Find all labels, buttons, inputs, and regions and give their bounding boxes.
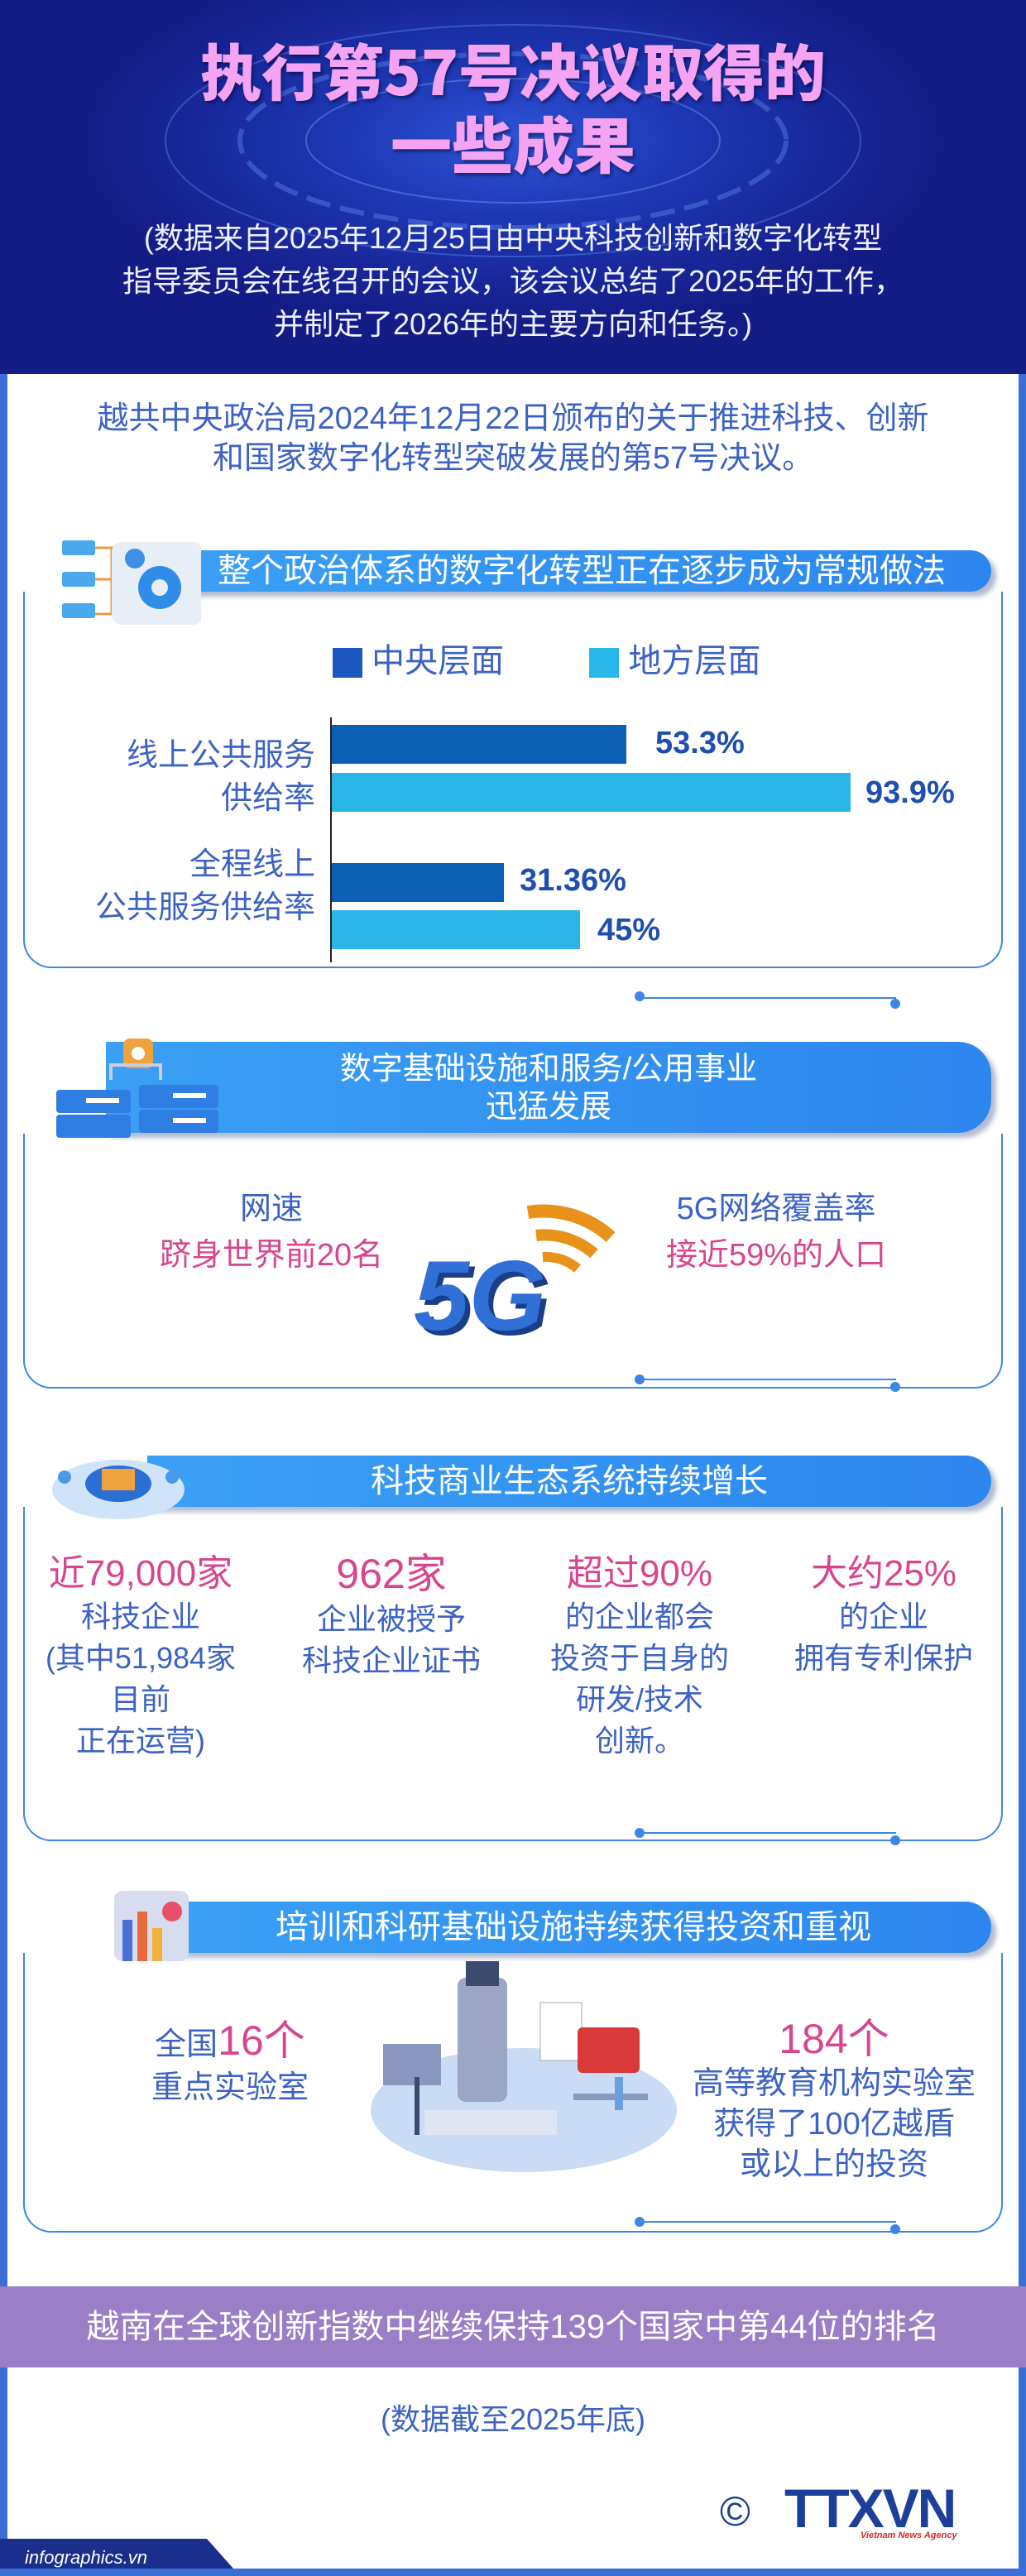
stat: 90%: 创新。	[595, 1724, 684, 1758]
illustration: laboratory	[371, 1961, 677, 2172]
bar chart: 线上公共服务	[127, 738, 315, 773]
ranking band	[0, 2286, 1026, 2367]
icon: 5G	[414, 1205, 616, 1345]
bar chart: 53.3%	[655, 726, 745, 760]
panel 2 box	[23, 1134, 1003, 1389]
stat: 184 institutions: 184个	[779, 2016, 889, 2062]
text: 5G coverage	[666, 1192, 886, 1273]
stat: 962	[302, 1551, 481, 1677]
panel 4 box	[23, 1953, 1003, 2233]
panel 1 box	[23, 592, 1003, 968]
header background	[0, 0, 1026, 374]
subtitle: 指导委员会在线召开的会议，该会议总结了2025年的工作，	[122, 264, 904, 298]
subtitle	[122, 221, 904, 341]
stat: 16 labs: 全国16个	[155, 2017, 305, 2064]
text: internet speed: 跻身世界前20名	[160, 1238, 383, 1273]
stat: 79000	[46, 1553, 236, 1758]
icon: servers	[56, 1039, 218, 1138]
stat: 962: 企业被授予	[317, 1602, 466, 1636]
title	[200, 25, 827, 186]
bar chart: 31.36%	[520, 863, 626, 898]
bar chart: 93.9%	[865, 775, 955, 810]
icon: network platform	[52, 1460, 185, 1519]
stat: 962: 962家	[336, 1551, 447, 1597]
stat: 25%: 大约25%	[811, 1553, 956, 1594]
panel 3 header: 科技商业生态系统持续增长	[371, 1463, 768, 1499]
stat: 90%: 的企业都会	[565, 1600, 714, 1633]
stat: 79000: 科技企业	[81, 1600, 200, 1633]
stat: 184 institutions: 获得了100亿越盾	[713, 2107, 955, 2142]
intro text	[97, 401, 929, 476]
ranking band: 越南在全球创新指数中继续保持139个国家中第44位的排名	[86, 2309, 940, 2345]
stat: 79000: 近79,000家	[49, 1553, 233, 1594]
stat: 25%	[794, 1553, 973, 1675]
stat: 79000: 目前	[111, 1682, 170, 1716]
panel 4: training and research	[23, 1891, 1003, 2233]
panel 1 header: 整个政治体系的数字化转型正在逐步成为常规做法	[218, 553, 946, 589]
legend: 中央层面 地方层面	[372, 643, 760, 679]
logo: TTXVN: Vietnam News Agency	[861, 2530, 957, 2540]
stat: 962: 科技企业证书	[302, 1643, 481, 1677]
text: internet speed	[160, 1192, 383, 1273]
side borders	[0, 0, 7, 2576]
stat: 16 labs	[151, 2017, 309, 2105]
logo: TTXVN: TTXVN	[784, 2478, 955, 2539]
stat: 90%: 研发/技术	[576, 1682, 703, 1716]
data note: (数据截至2025年底)	[381, 2402, 645, 2436]
bar chart	[95, 717, 955, 962]
panel 3 box	[23, 1507, 1003, 1841]
bar chart: 公共服务供给率	[95, 890, 315, 925]
subtitle: (数据来自2025年12月25日由中央科技创新和数字化转型	[144, 221, 882, 255]
bar chart: 45%	[597, 913, 660, 947]
footer	[0, 2539, 233, 2569]
title: 执行第57号决议取得的	[200, 25, 826, 113]
stat: 90%: 投资于自身的	[550, 1641, 729, 1675]
panel 2: infrastructure	[23, 1039, 1003, 1389]
text: 5G coverage: 接近59%的人口	[666, 1238, 886, 1273]
text: internet speed: 网速	[240, 1192, 303, 1226]
logo: TTXVN: ©	[720, 2488, 750, 2535]
stat: 16 labs: 重点实验室	[151, 2070, 309, 2105]
intro text: 越共中央政治局2024年12月22日颁布的关于推进科技、创新	[97, 401, 929, 436]
stat: 25%: 拥有专利保护	[794, 1641, 973, 1675]
icon: lab tools	[114, 1891, 189, 1961]
panel 2 header	[106, 1042, 991, 1133]
stat: 90%	[550, 1553, 729, 1758]
text: 5G coverage: 5G网络覆盖率	[677, 1192, 875, 1226]
bar chart: 供给率	[221, 781, 315, 816]
panel 2 header: 迅猛发展	[486, 1090, 611, 1125]
stat: 184 institutions: 高等教育机构实验室	[693, 2066, 976, 2101]
panel 4 header	[156, 1902, 991, 1953]
stat: 25%: 的企业	[839, 1600, 928, 1633]
panel 3: tech business	[23, 1456, 1003, 1841]
panel 1: digital transformation	[23, 540, 1003, 999]
panel 4 header: 培训和科研基础设施持续获得投资和重视	[276, 1909, 871, 1945]
stat: 90%: 超过90%	[567, 1553, 712, 1594]
stat: 79000: 正在运营)	[76, 1724, 205, 1758]
subtitle: 并制定了2026年的主要方向和任务。)	[274, 307, 752, 341]
panel 2 header: 数字基础设施和服务/公用事业	[340, 1052, 757, 1087]
footer: infographics.vn	[25, 2547, 147, 2568]
bar chart: 全程线上	[189, 847, 315, 882]
intro text: 和国家数字化转型突破发展的第57号决议。	[213, 441, 813, 476]
stat: 184 institutions	[693, 2016, 976, 2182]
stat: 184 institutions: 或以上的投资	[740, 2147, 928, 2182]
stat: 79000: (其中51,984家	[46, 1641, 236, 1675]
title: 一些成果	[391, 98, 635, 186]
icon: gears	[62, 540, 201, 625]
panel 3 header	[147, 1456, 991, 1507]
